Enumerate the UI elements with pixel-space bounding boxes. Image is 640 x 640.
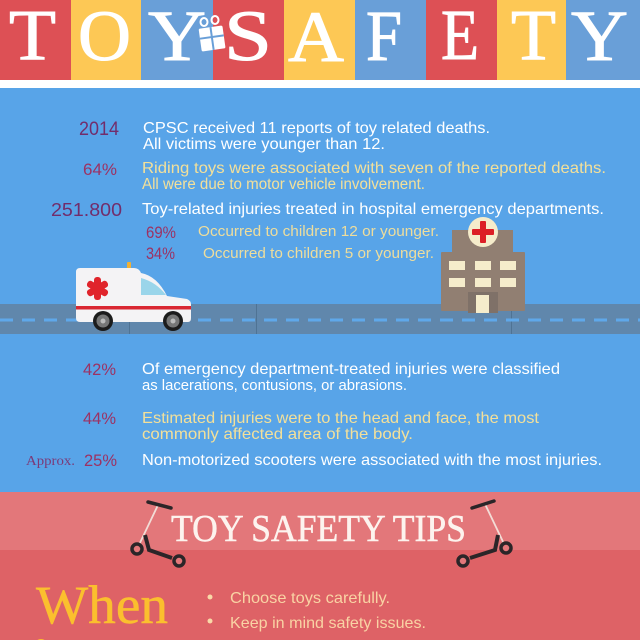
stats group two <box>26 360 602 470</box>
stats group one: Occurred to children 5 or younger. <box>203 245 434 262</box>
stats group one: Occurred to children 12 or younger. <box>198 223 439 240</box>
stats group two: Of emergency department-treated injuries were classified <box>142 361 560 378</box>
tips banner <box>0 492 640 640</box>
icon: hospital <box>441 217 525 313</box>
stats group two: commonly affected area of the body. <box>142 426 413 443</box>
stats group one: All were due to motor vehicle involvement. <box>142 176 425 193</box>
stats group one: CPSC received 11 reports of toy related deaths. <box>143 120 490 137</box>
stats group two: 42% <box>83 360 116 379</box>
icon: left scooter <box>132 502 184 566</box>
stats group one: 34% <box>146 244 175 263</box>
stats group one: 2014 <box>79 119 119 140</box>
tips list: Choose toys carefully. <box>230 590 390 607</box>
stats group two: 44% <box>83 409 116 428</box>
stats group one: All victims were younger than 12. <box>143 136 385 153</box>
stats group one: Toy-related injuries treated in hospital emergency departments. <box>142 201 604 218</box>
stats group two: 25% <box>84 451 117 470</box>
road <box>0 304 640 334</box>
stats group one: 64% <box>83 160 117 179</box>
heading: when: When <box>36 575 168 635</box>
stats group two: as lacerations, contusions, or abrasions. <box>142 377 407 394</box>
heading: toy safety tips: TOY SAFETY TIPS <box>171 508 466 550</box>
stats group two: Approx. <box>26 454 75 469</box>
icon: right scooter <box>458 501 511 566</box>
stats group two: Non-motorized scooters were associated with the most injuries. <box>142 452 602 469</box>
stats group one: Riding toys were associated with seven of the reported deaths. <box>142 160 606 177</box>
tips list: Keep in mind safety issues. <box>230 615 426 632</box>
tips list <box>208 590 426 632</box>
next item peek <box>34 639 48 640</box>
stats group one: 251.800 <box>51 200 122 220</box>
title banner <box>0 0 640 88</box>
icon: ambulance <box>76 262 191 331</box>
stats group one: 69% <box>146 223 176 242</box>
stats group two: Estimated injuries were to the head and face, the most <box>142 410 540 427</box>
icon: gift box <box>199 16 226 52</box>
stats group one <box>51 119 606 263</box>
